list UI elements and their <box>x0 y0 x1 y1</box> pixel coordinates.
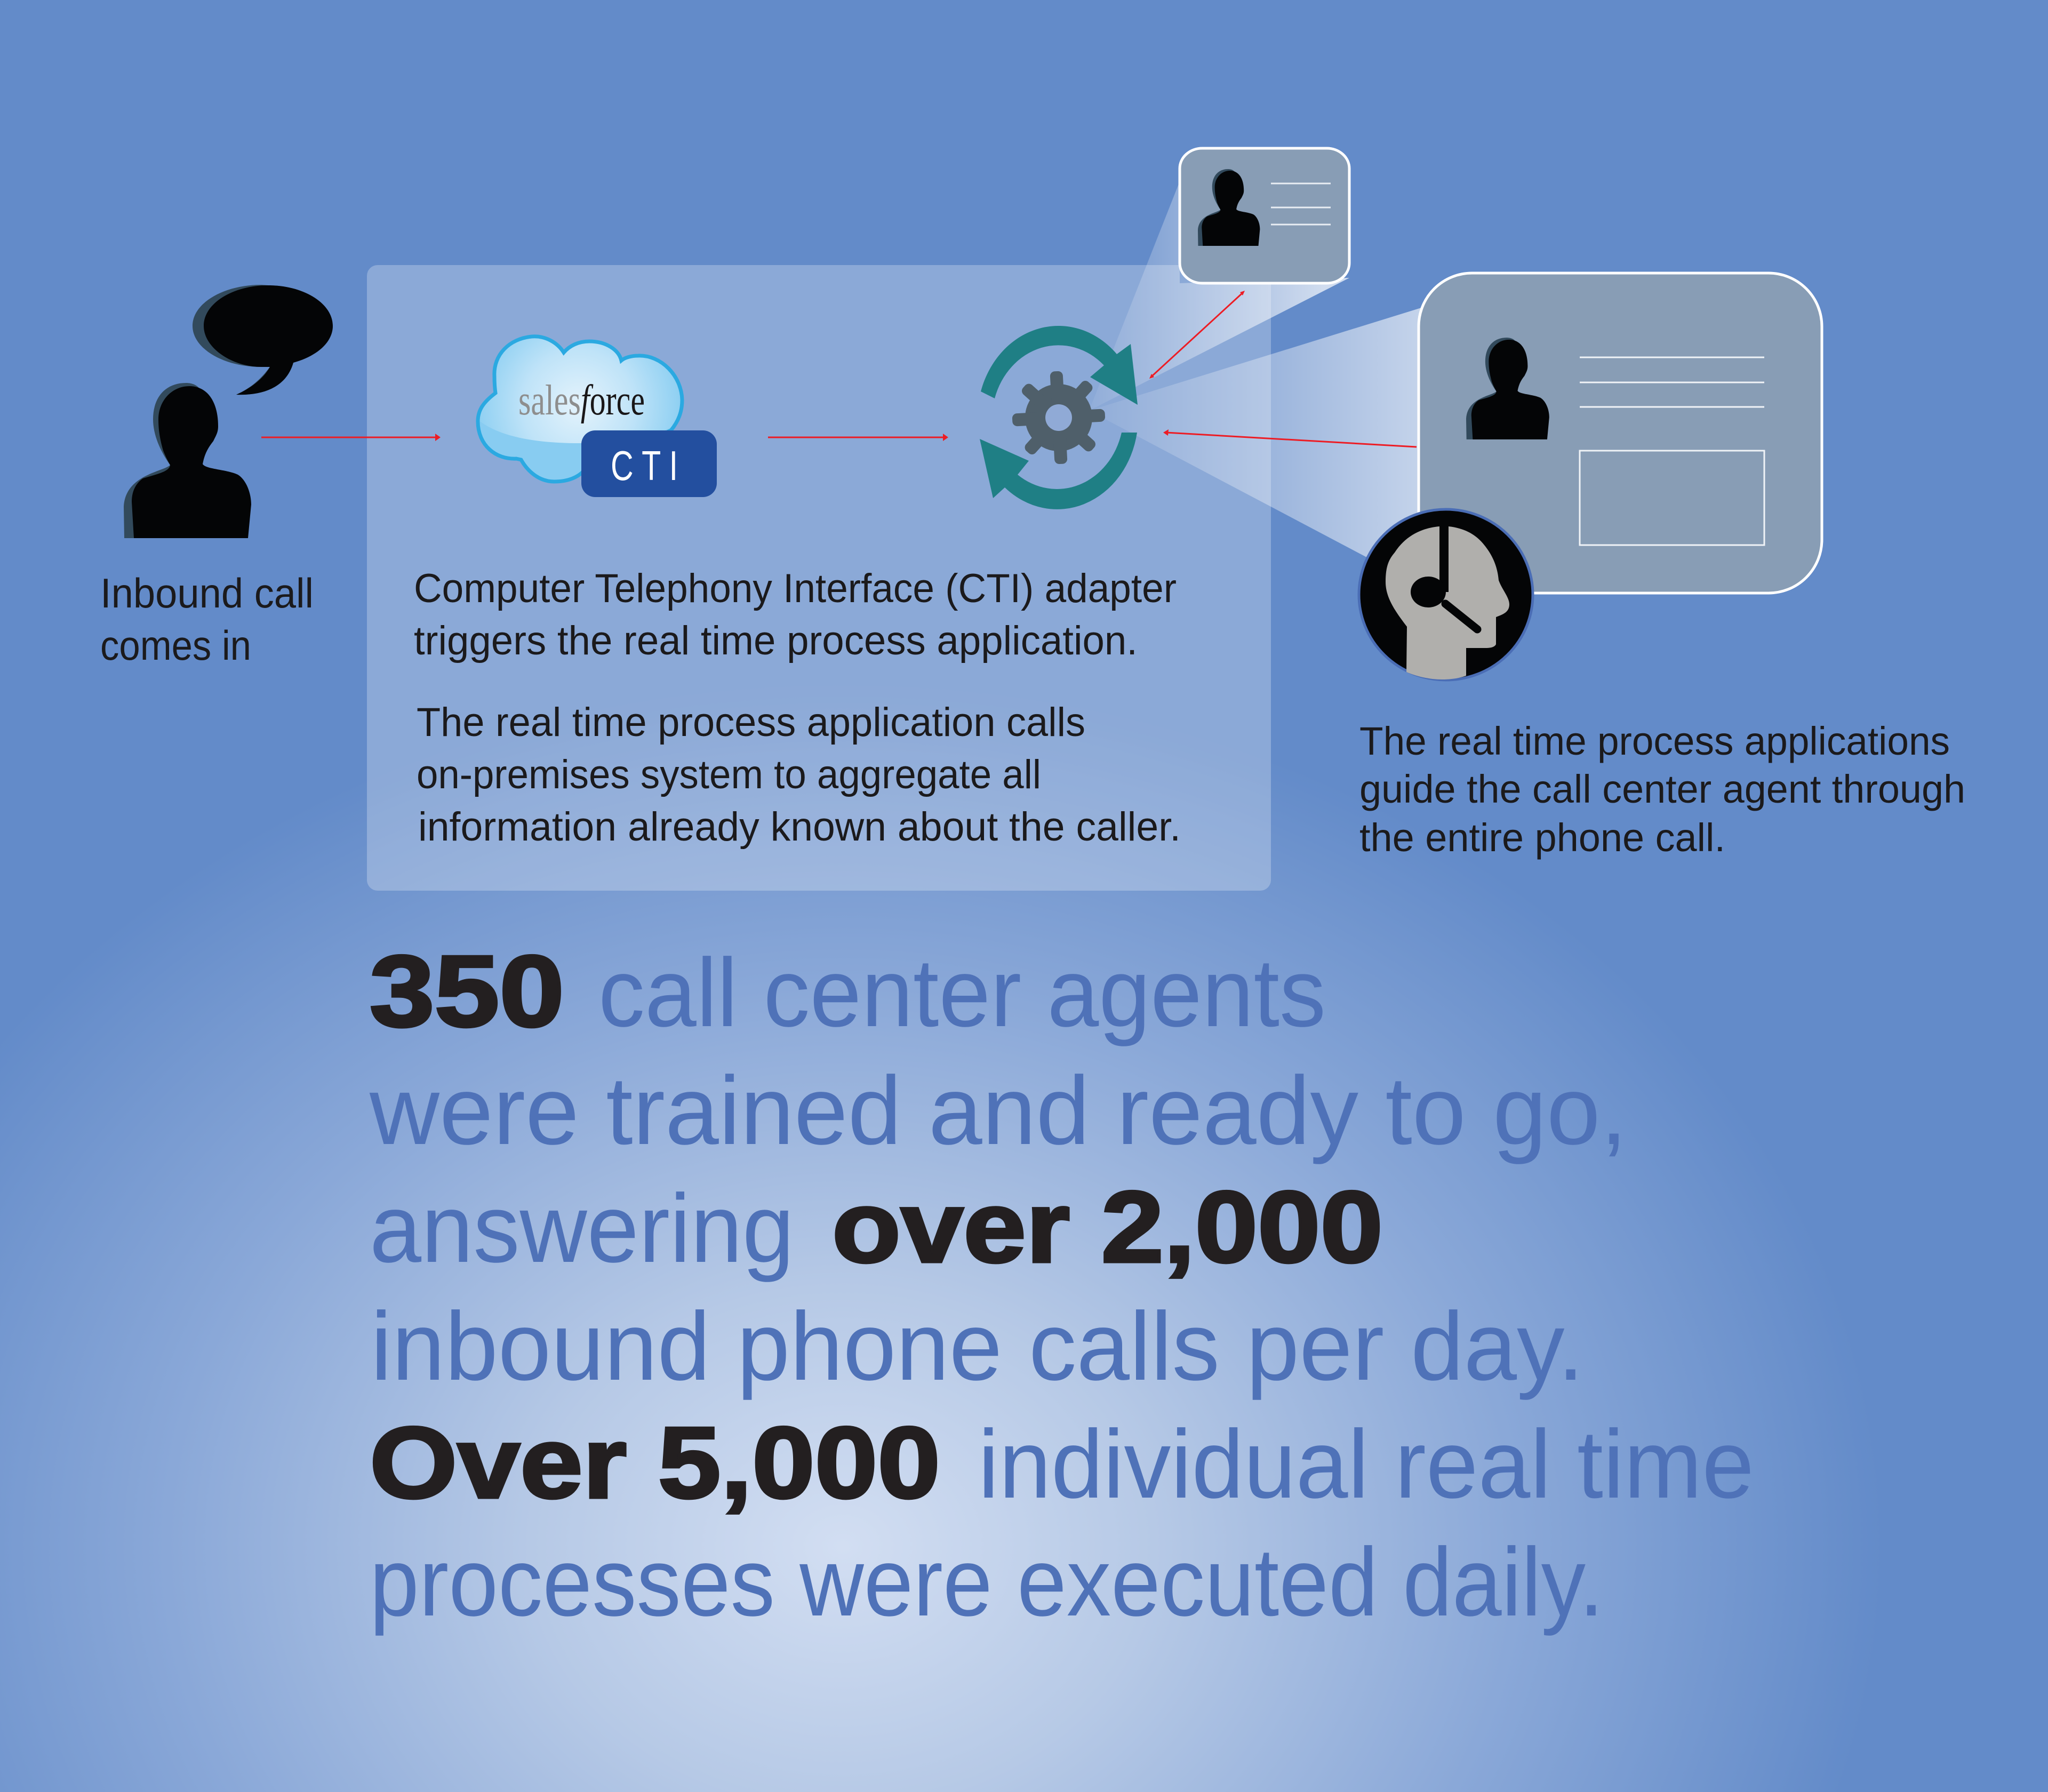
light beams from process gear to the cards <box>1089 181 1421 587</box>
icon: small silhouette <box>1198 169 1260 246</box>
line: inbound phone calls: inbound phone calls per day. <box>371 1292 1584 1401</box>
text: on-premises description: The real time process application calls <box>417 700 1085 745</box>
record lines <box>1271 183 1331 225</box>
text: CTI adapter description: Computer Telephony Interface (CTI) adapter <box>414 566 1177 611</box>
text: CTI adapter description <box>414 566 1177 663</box>
icon: speech bubble <box>193 285 333 395</box>
arrow: CTI to process <box>768 434 948 441</box>
line: 350 call center agents: call center agents <box>598 938 1326 1047</box>
line: processes executed daily: processes were executed daily. <box>370 1527 1604 1636</box>
icon: caller silhouette <box>124 383 251 538</box>
headset <box>1411 525 1477 629</box>
line: were trained: were trained and ready to go, <box>369 1056 1627 1165</box>
salesforce logotype: salesforce <box>518 377 645 424</box>
record lines <box>1580 357 1764 407</box>
line: over 5,000 individual: individual real time <box>978 1410 1754 1518</box>
icon: caller with speech bubble <box>124 285 333 538</box>
line: answering over 2,000: over 2,000 <box>832 1171 1383 1284</box>
line: answering over 2,000 <box>370 1171 1383 1284</box>
icon: gear with circular arrows <box>980 326 1138 509</box>
headline statistics <box>369 935 1754 1636</box>
gear <box>1012 371 1106 465</box>
line: answering over 2,000: answering <box>370 1174 794 1283</box>
icon: cloud <box>478 337 682 482</box>
text: inbound call comes in: comes in <box>100 622 251 669</box>
text: on-premises description: information already known about the caller. <box>418 804 1181 850</box>
text: on-premises description: on-premises system to aggregate all <box>417 752 1041 797</box>
card: small caller record <box>1180 148 1349 283</box>
line: over 5,000 individual: Over 5,000 <box>370 1406 940 1519</box>
arrow: caller to CTI <box>261 434 441 441</box>
text: inbound call comes in <box>100 570 314 669</box>
text: agent guidance description: The real time process applications <box>1359 719 1950 763</box>
record box <box>1580 451 1764 545</box>
arrow: agent card to process <box>1163 429 1417 447</box>
icon: large silhouette <box>1466 338 1549 439</box>
arrow: two-way process to small card <box>1149 291 1245 379</box>
text: agent guidance description: guide the call center agent through <box>1359 767 1965 811</box>
text: CTI adapter description: triggers the real time process application. <box>414 618 1138 663</box>
circular arrows <box>980 326 1138 509</box>
panel: CTI and real time process <box>367 265 1271 891</box>
line: 350 call center agents: 350 <box>370 935 564 1048</box>
icon: agent with headset <box>1359 509 1533 680</box>
agent head <box>1386 526 1509 679</box>
text: agent guidance description: the entire phone call. <box>1359 815 1725 860</box>
CTI badge: C T I <box>611 442 678 489</box>
card: large agent screen <box>1419 273 1822 593</box>
CTI badge <box>581 430 717 497</box>
text: inbound call comes in: Inbound call <box>100 570 314 617</box>
text: on-premises description <box>417 700 1181 850</box>
icon: salesforce cloud with CTI badge <box>478 337 717 497</box>
text: agent guidance description <box>1359 719 1965 860</box>
line: over 5,000 individual <box>370 1406 1754 1519</box>
